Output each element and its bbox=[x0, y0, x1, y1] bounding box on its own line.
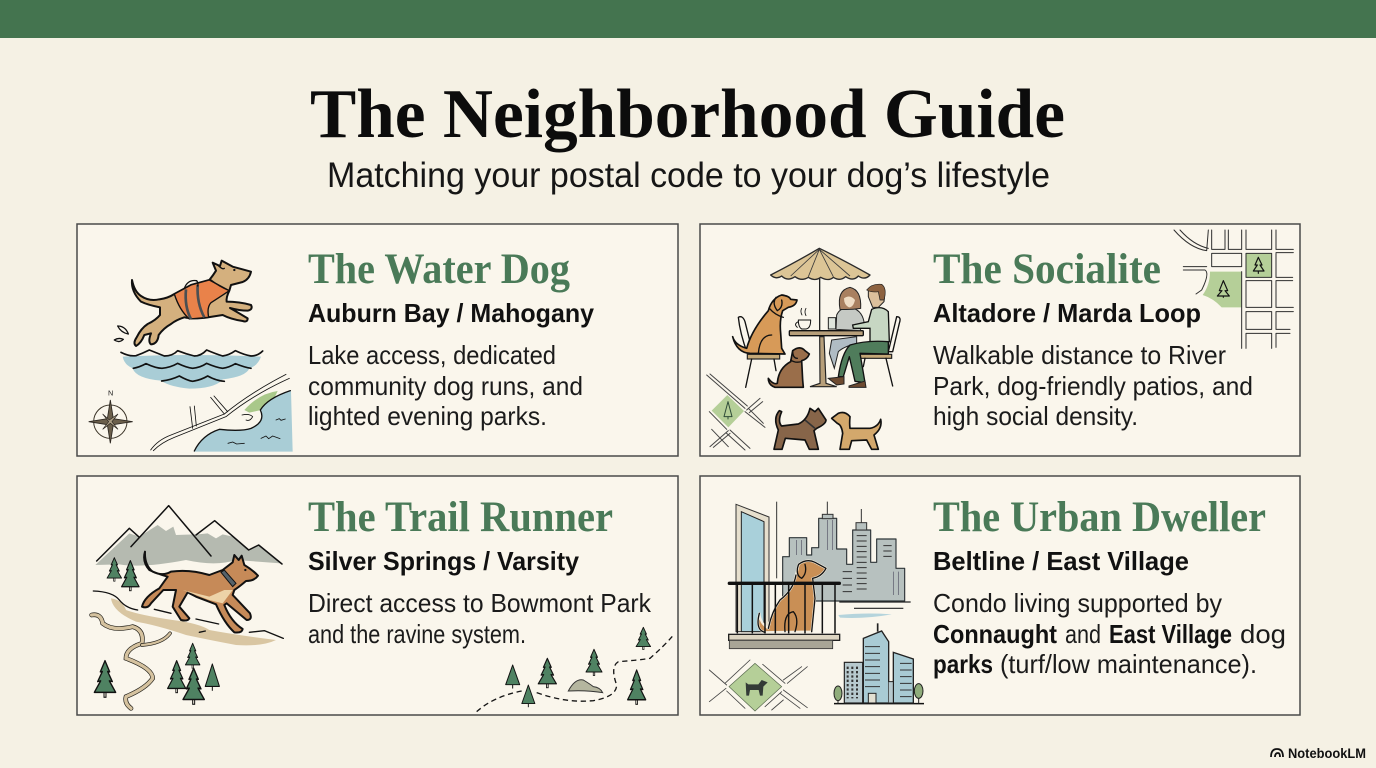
text block: water dog description: community dog runs, and bbox=[308, 371, 583, 401]
heading: The Water Dog: The Water Dog bbox=[308, 246, 570, 293]
icon: jumping dog in life vest bbox=[114, 261, 252, 346]
text block: socialite description: Walkable distance to River bbox=[933, 340, 1226, 370]
text block: urban dweller description bbox=[933, 588, 1286, 679]
text block: socialite description: high social density. bbox=[933, 401, 1138, 431]
text block: trail runner description bbox=[308, 588, 652, 649]
text block: trail runner description: and the ravine system. bbox=[308, 619, 526, 649]
icon: cafe table and coffee bbox=[789, 308, 863, 387]
heading: The Urban Dweller: The Urban Dweller bbox=[933, 494, 1266, 541]
icon: water waves bbox=[121, 350, 263, 389]
logo: NotebookLM: NotebookLM bbox=[1288, 746, 1366, 761]
illustration: trail map bbox=[477, 627, 673, 712]
icon: skyline bbox=[783, 502, 911, 618]
text block: water dog description: Lake access, dedicated bbox=[308, 340, 556, 370]
icon: dog on chair bbox=[733, 295, 797, 387]
icon: winding trail bbox=[92, 615, 170, 708]
illustration: balcony city scene bbox=[709, 502, 924, 711]
icon: compass rose bbox=[89, 389, 133, 443]
icon: balcony railing bbox=[729, 583, 840, 649]
icon: ridge path bbox=[93, 591, 283, 645]
illustration: patio scene bbox=[707, 248, 900, 450]
icon: small park map bbox=[707, 374, 765, 450]
icon: boulder bbox=[568, 680, 603, 693]
icon: patio umbrella bbox=[771, 248, 870, 332]
illustration: trail scene bbox=[92, 506, 283, 708]
icon: compass rose: N bbox=[108, 389, 113, 398]
text block: urban dweller description: parks bbox=[933, 649, 993, 679]
icon: running dog bbox=[142, 552, 258, 633]
subheading: Auburn Bay / Mahogany: Auburn Bay / Mahogany bbox=[308, 298, 595, 328]
heading: The Trail Runner: The Trail Runner bbox=[308, 494, 613, 541]
subtitle: Matching your postal code to your dog’s lifestyle bbox=[327, 156, 1050, 195]
icon: small dog under table bbox=[768, 348, 809, 387]
icon: lake map bbox=[151, 374, 293, 452]
icon: dog on balcony bbox=[758, 561, 826, 632]
text block: trail runner description: Direct access to Bowmont Park bbox=[308, 588, 652, 618]
text block: socialite description bbox=[933, 340, 1253, 431]
text block: urban dweller description: and bbox=[1065, 619, 1101, 649]
text block: socialite description: Park, dog-friendly patios, and bbox=[933, 371, 1253, 401]
subheading: Altadore / Marda Loop: Altadore / Marda Loop bbox=[933, 298, 1201, 328]
illustration: water dog scene bbox=[89, 261, 293, 452]
text block: urban dweller description: East Village bbox=[1109, 619, 1232, 649]
icon: pines bbox=[94, 558, 219, 704]
text block: urban dweller description: dog bbox=[1240, 619, 1286, 649]
icon: terrier bbox=[774, 408, 826, 449]
icon: golden puppy bbox=[832, 413, 881, 449]
panel: The Water Dog bbox=[77, 224, 678, 456]
panel: The Urban Dweller bbox=[700, 476, 1300, 715]
text block: water dog description bbox=[308, 340, 583, 431]
text block: urban dweller description: (turf/low maintenance). bbox=[1000, 649, 1257, 679]
icon: dog park map bbox=[709, 660, 807, 711]
text block: water dog description: lighted evening parks. bbox=[308, 401, 547, 431]
icon: mountains bbox=[95, 506, 282, 566]
heading: The Socialite: The Socialite bbox=[933, 246, 1161, 293]
icon: dashed trail bbox=[477, 636, 673, 712]
icon: man at table bbox=[828, 284, 900, 387]
map: street grid with parks bbox=[1174, 230, 1293, 348]
title: The Neighborhood Guide bbox=[310, 76, 1065, 153]
text block: urban dweller description: Condo living supported by bbox=[933, 588, 1222, 618]
subheading: Silver Springs / Varsity: Silver Springs / Varsity bbox=[308, 546, 580, 576]
panel: The Socialite bbox=[700, 224, 1300, 456]
icon: map trees bbox=[506, 627, 651, 707]
icon: woman at table bbox=[829, 287, 864, 368]
icon: splash drops bbox=[114, 326, 128, 342]
icon: balcony door bbox=[736, 502, 777, 632]
subheading: Beltline / East Village: Beltline / East Village bbox=[933, 546, 1189, 576]
icon: modern buildings bbox=[834, 623, 924, 704]
panel: The Trail Runner bbox=[77, 476, 678, 715]
top green band bbox=[0, 0, 1376, 38]
text block: urban dweller description: Connaught bbox=[933, 619, 1057, 649]
